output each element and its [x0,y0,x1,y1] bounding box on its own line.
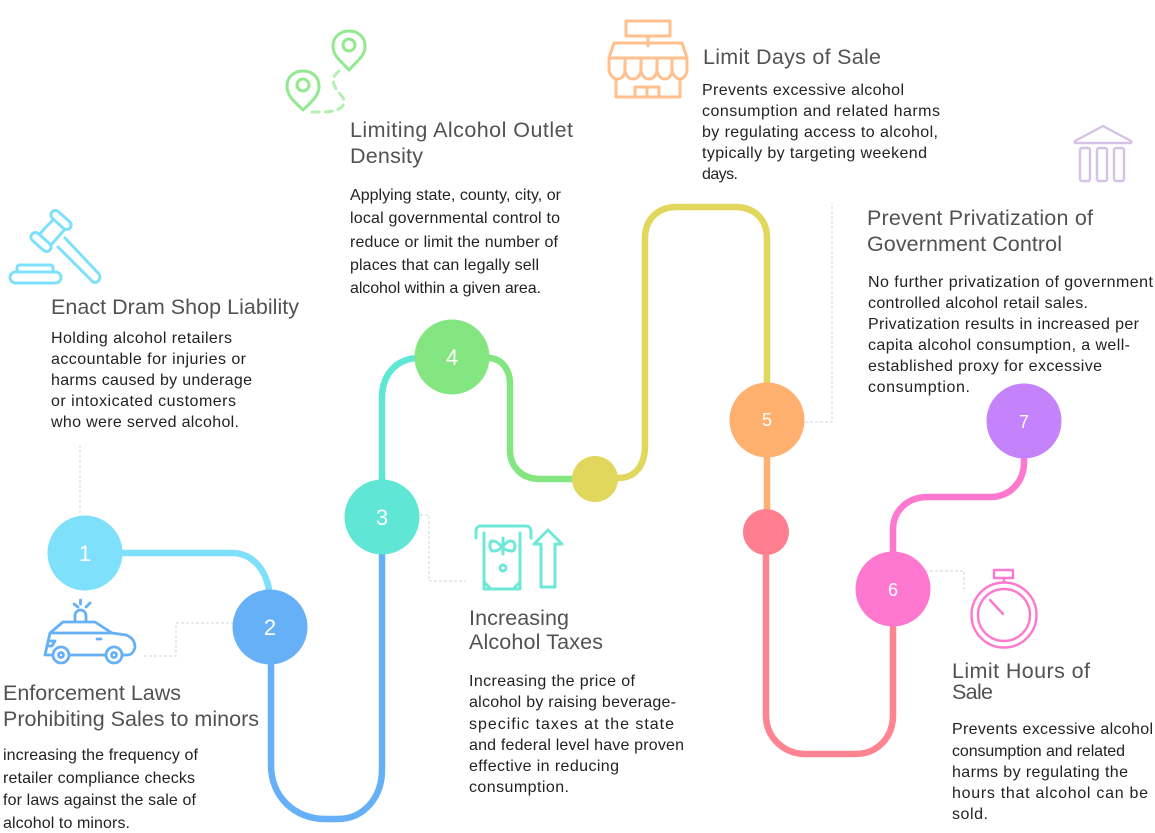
text: days of sale description: days. [702,166,738,183]
heading: Prevent Privatization of Government Control: Prevent Privatization of [867,206,1093,230]
path segment 3 to 4 [382,358,452,517]
path segment yellow node to 5 [595,207,767,478]
icon: map pins [287,31,365,112]
text: taxes description: Increasing the price of [469,673,636,690]
heading: Prevent Privatization of Government Control: Government Control [867,232,1062,256]
node 2 [232,590,308,664]
heading: Enforcement Laws: Enforcement Laws [3,681,181,705]
path segment 5 to red node [764,420,770,532]
node 7 [986,384,1062,458]
icon: cash and up arrow [476,526,562,589]
heading: Limiting Alcohol Outlet Density: Limiting Alcohol Outlet [350,118,573,142]
text: privatization description [868,274,1154,396]
text: privatization description: controlled alcohol retail sales. [868,295,1088,312]
text: privatization description: No further privatization of government [868,274,1154,291]
heading: Enforcement Laws [3,681,259,731]
path: winding road [85,207,1024,819]
text: hours of sale description [952,721,1153,823]
path segment 6 to 7 [893,421,1024,589]
text: dram shop description [50,330,252,431]
text: outlet density description: alcohol within a given area. [350,280,541,297]
text: hours of sale description: hours that alcohol can be [952,785,1148,802]
path segment 4 to yellow node [452,358,595,479]
text: enforcement description: increasing the frequency of [3,747,199,764]
heading: Enact Dram Shop Liability: Enact Dram Shop Liability [51,295,299,319]
text: dram shop description: who were served alcohol. [50,414,239,431]
text: taxes description [469,673,684,796]
node 2: 2 [264,615,276,640]
text: days of sale description: by regulating access to alcohol, [702,124,938,141]
heading: Limit Hours of Sale: Limit Hours of [952,659,1090,683]
node 6: 6 [888,580,898,600]
node 4: 4 [446,345,458,370]
text: outlet density description: reduce or limit the number of [350,234,559,251]
text: dram shop description: harms caused by underage [51,372,252,389]
node 3: 3 [376,505,388,530]
text: enforcement description: retailer compliance checks [3,770,195,787]
icon: police car [45,600,135,663]
node 3 [344,480,420,554]
text: dram shop description: Holding alcohol retailers [51,330,232,347]
text: dram shop description: accountable for injuries or [51,351,247,368]
text: privatization description: consumption. [868,379,970,396]
text: privatization description: Privatization results in increased per [868,316,1140,333]
text: taxes description: effective in reducing [469,758,619,775]
heading: Limit Days of Sale: Limit Days of Sale [703,45,881,69]
text: taxes description: specific taxes at the state [469,716,674,733]
icon: government building [1075,126,1131,181]
yellow node [572,456,618,502]
text: days of sale description: Prevents excessive alcohol [702,82,904,99]
heading: Increasing Alcohol Taxes: Increasing [469,606,569,630]
heading: Prevent Privatization of Government Control [867,206,1093,256]
path segment red node to 6 [766,532,893,754]
text: hours of sale description: consumption and related [952,743,1125,760]
text: taxes description: and federal level have proven [469,737,684,754]
heading: Enforcement Laws: Prohibiting Sales to minors [3,707,259,731]
text: enforcement description [3,747,199,832]
heading: Increasing Alcohol Taxes [469,606,603,654]
text: hours of sale description: sold. [952,806,988,823]
text: outlet density description [350,187,562,297]
text: privatization description: capita alcohol consumption, a well- [868,337,1130,354]
icon: storefront [609,21,687,97]
text: enforcement description: alcohol to minors. [3,815,130,832]
text: enforcement description: for laws against the sale of [3,792,197,809]
icon: gavel [10,209,100,283]
heading: Increasing Alcohol Taxes: Alcohol Taxes [469,630,603,654]
text: outlet density description: local governmental control to [350,210,560,227]
text: outlet density description: places that can legally sell [350,257,539,274]
path segment 2 to 3 [271,517,382,819]
node 1 [48,516,122,590]
path segment 1 to 2 [85,553,270,600]
text: hours of sale description: Prevents excessive alcohol [952,721,1153,738]
text: taxes description: alcohol by raising beverage- [469,694,676,711]
text: taxes description: consumption. [469,779,569,796]
icon: stopwatch [972,570,1036,648]
node 5: 5 [762,410,772,430]
heading: Limiting Alcohol Outlet Density [350,118,573,168]
text: days of sale description: typically by targeting weekend [702,145,927,162]
heading: Limiting Alcohol Outlet Density: Density [350,144,423,168]
node 1: 1 [79,541,91,566]
heading: Limit Hours of Sale: Sale [952,680,993,704]
node 6 [856,552,930,626]
text: hours of sale description: harms by regulating the [952,764,1128,781]
node 5 [730,382,804,458]
text: days of sale description [702,82,940,183]
node 7: 7 [1019,412,1029,432]
node 4 [414,320,490,394]
text: privatization description: established proxy for excessive [868,358,1102,375]
text: dram shop description: or intoxicated customers [51,393,236,410]
red node [743,509,789,555]
text: outlet density description: Applying state, county, city, or [350,187,562,204]
text: days of sale description: consumption and related harms [702,103,940,120]
heading: Limit Hours of Sale [952,659,1090,704]
